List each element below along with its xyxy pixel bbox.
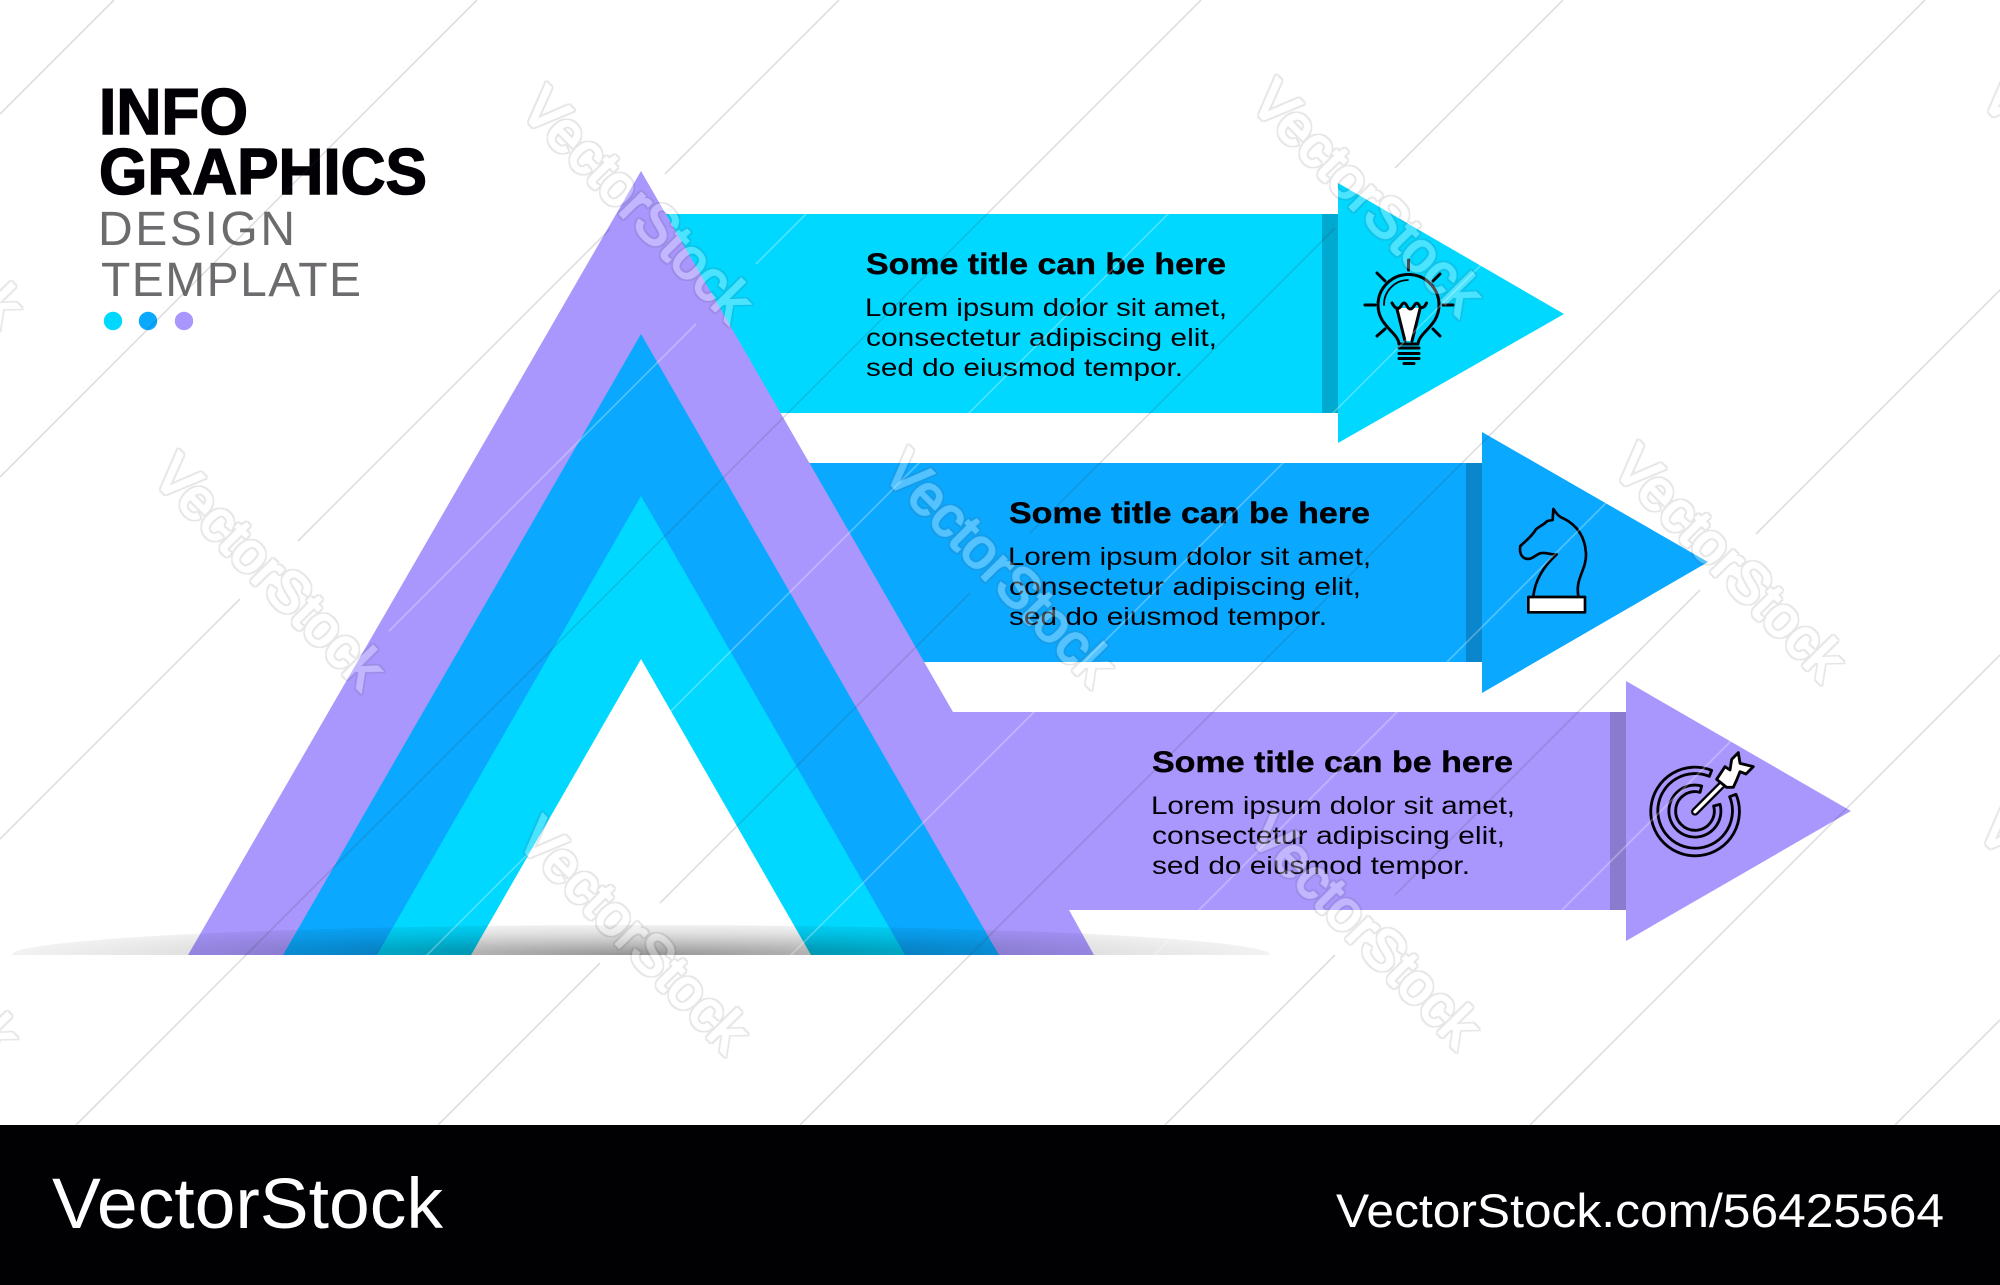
watermark text: VectorStock xyxy=(141,442,398,701)
watermark text: VectorStock xyxy=(1601,433,1858,692)
text block 3 xyxy=(1151,746,1515,880)
footer url: VectorStock.com/56425564 xyxy=(1336,1184,1944,1237)
arrow 3 and outer triangle: purple xyxy=(188,171,1851,955)
middle triangle: blue xyxy=(283,334,999,955)
heading: INFO: INFO xyxy=(99,75,248,148)
body 3 xyxy=(1151,792,1515,880)
blue arrow bar xyxy=(760,463,1482,662)
icon: target with arrow xyxy=(1651,753,1753,856)
footer logo: VectorStock xyxy=(52,1165,444,1244)
watermark text: VectorStock xyxy=(509,75,766,334)
cyan arrow head xyxy=(1338,183,1564,443)
arrow 2: blue xyxy=(760,432,1708,693)
watermark text: VectorStock xyxy=(1239,68,1496,327)
watermark text xyxy=(0,64,2000,1068)
title block xyxy=(98,75,427,330)
watermark text: VectorStock xyxy=(1236,800,1493,1059)
subheading: DESIGN: DESIGN xyxy=(98,203,295,256)
body 1: sed do eiusmod tempor. xyxy=(866,354,1183,382)
cyan arrow bar xyxy=(620,214,1338,413)
body 2: sed do eiusmod tempor. xyxy=(1009,603,1327,631)
body 3: sed do eiusmod tempor. xyxy=(1152,852,1470,880)
cyan fold band xyxy=(1322,214,1338,413)
inner triangle: cyan xyxy=(377,496,905,955)
ground shadow xyxy=(12,925,1270,955)
body 1 xyxy=(865,294,1227,382)
title 1: Some title can be here xyxy=(866,248,1226,281)
body 3: consectetur adipiscing elit, xyxy=(1152,822,1505,850)
icon: chess knight xyxy=(1520,509,1586,612)
title 3: Some title can be here xyxy=(1152,746,1513,779)
blue arrow head xyxy=(1482,432,1708,693)
purple arrow head xyxy=(1626,681,1851,941)
blue fold band xyxy=(1466,463,1482,662)
three colour dots xyxy=(104,312,193,330)
text block 2 xyxy=(1008,497,1371,631)
footer bar xyxy=(0,1125,2000,1285)
body 3: Lorem ipsum dolor sit amet, xyxy=(1151,792,1515,820)
text block 1 xyxy=(865,248,1227,382)
body 2: consectetur adipiscing elit, xyxy=(1009,573,1361,601)
body 2 xyxy=(1008,543,1371,631)
watermark text: VectorStock xyxy=(871,438,1128,697)
centre triangle: white xyxy=(471,659,811,955)
body 2: Lorem ipsum dolor sit amet, xyxy=(1008,543,1371,571)
title 2: Some title can be here xyxy=(1009,497,1370,530)
watermark diagonal lines: light xyxy=(300,0,2000,1092)
subheading: TEMPLATE: TEMPLATE xyxy=(101,254,361,307)
purple fold band xyxy=(1610,712,1626,910)
body 1: consectetur adipiscing elit, xyxy=(866,324,1217,352)
arrow 1: cyan xyxy=(620,183,1564,443)
body 1: Lorem ipsum dolor sit amet, xyxy=(865,294,1227,322)
heading: GRAPHICS: GRAPHICS xyxy=(99,135,427,208)
icon: light bulb xyxy=(1365,260,1453,364)
watermark text: VectorStock xyxy=(505,805,762,1064)
purple triangle with arrow bar xyxy=(188,171,1626,955)
